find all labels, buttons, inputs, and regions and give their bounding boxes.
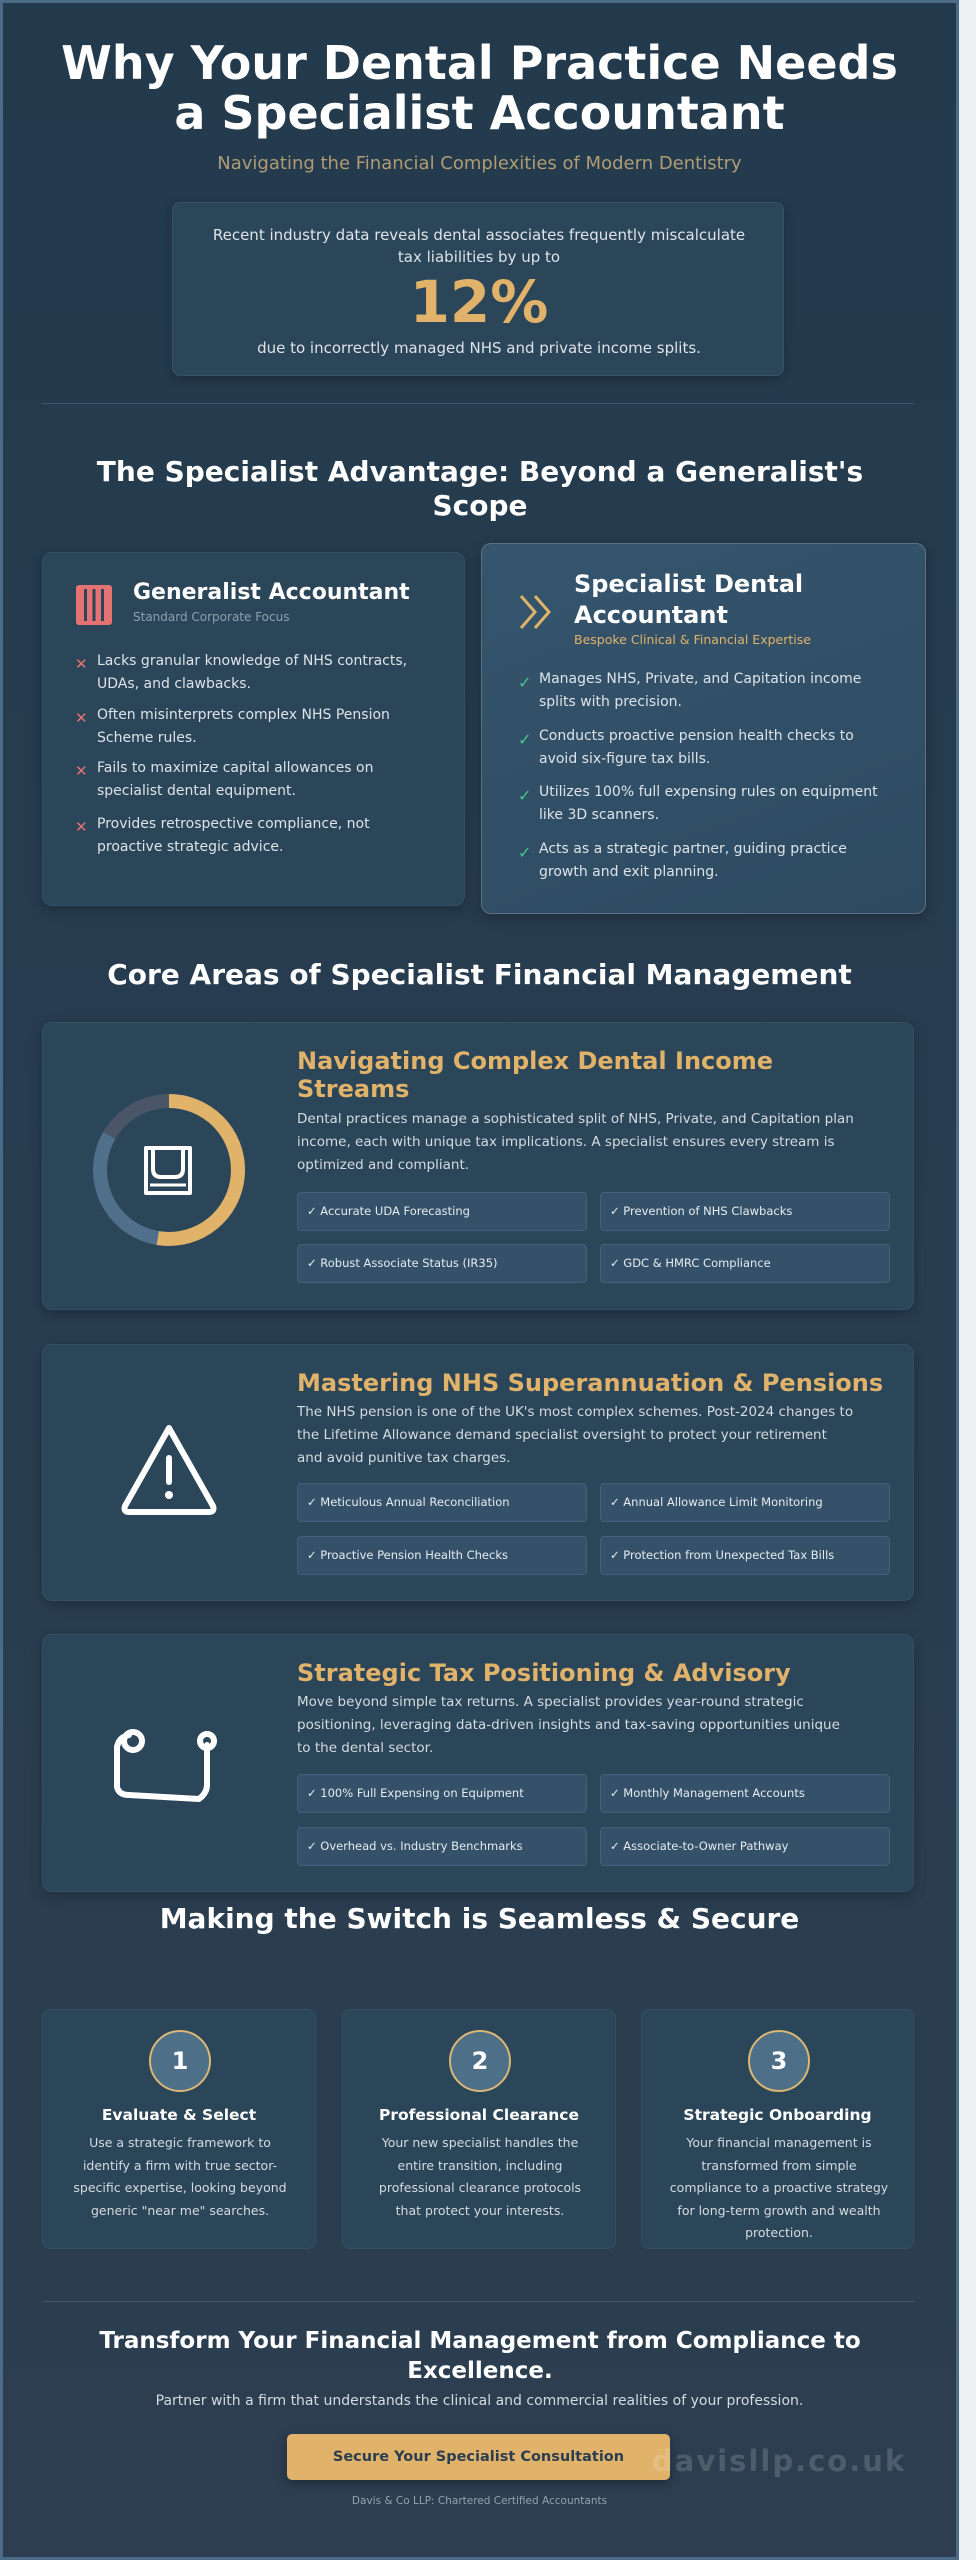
- specialist list: Utilizes 100% full expensing rules on equipment like 3D scanners.: [539, 784, 878, 823]
- income text: Dental practices manage a sophisticated split of NHS, Private, and Capitation plan income, each with unique tax implications. A specialist ensures every stream is optimized and compliant.: [297, 1111, 854, 1173]
- title: [61, 36, 898, 140]
- specialist title: [574, 570, 803, 629]
- title: a Specialist Accountant: [174, 86, 785, 140]
- specialist list: ✓: [518, 730, 531, 749]
- generalist list: ✕: [75, 818, 88, 836]
- advisory feature pills: ✓ Overhead vs. Industry Benchmarks: [307, 1839, 523, 1853]
- specialist list: Conducts proactive pension health checks to avoid six-figure tax bills.: [539, 728, 854, 767]
- CTA button: Secure Your Specialist Consultation: [333, 2449, 624, 2465]
- generalist list: Often misinterprets complex NHS Pension Scheme rules.: [97, 707, 390, 746]
- generalist list: Provides retrospective compliance, not proactive strategic advice.: [97, 816, 370, 855]
- generalist list: Lacks granular knowledge of NHS contracts, UDAs, and clawbacks.: [97, 653, 407, 692]
- icon: generalist building: [76, 585, 112, 625]
- income text: [297, 1047, 854, 1173]
- advisory feature pills: ✓ 100% Full Expensing on Equipment: [307, 1786, 524, 1800]
- stat intro text: Recent industry data reveals dental associates frequently miscalculate: [213, 226, 745, 244]
- generalist list: ✕: [75, 709, 88, 727]
- title: Why Your Dental Practice Needs: [61, 36, 898, 90]
- pensions text: and avoid punitive tax charges.: [297, 1450, 510, 1466]
- generalist list: ✕: [75, 762, 88, 780]
- panel: NHS pensions: [42, 1344, 914, 1601]
- step 1: 1: [172, 2047, 188, 2075]
- step 2: 2: [472, 2047, 488, 2075]
- advisory text: to the dental sector.: [297, 1740, 433, 1756]
- step 2: Professional Clearance: [379, 2106, 579, 2124]
- step 2: [342, 2009, 616, 2249]
- pensions feature pills: ✓ Annual Allowance Limit Monitoring: [610, 1495, 823, 1509]
- pensions feature pills: ✓ Proactive Pension Health Checks: [307, 1548, 508, 1562]
- step 3: 3: [771, 2047, 787, 2075]
- specialist title: Specialist Dental: [574, 570, 803, 598]
- icon: gold chevrons: [520, 595, 551, 629]
- footer credit: Davis & Co LLP: Chartered Certified Accountants: [352, 2495, 607, 2507]
- icon: strategy scribble: [114, 1729, 217, 1802]
- advisory feature pills: ✓ Associate-to-Owner Pathway: [610, 1839, 788, 1853]
- step 3: Your financial management is transformed from simple compliance to a proactive strategy for long-term growth and wealth protection.: [670, 2135, 888, 2240]
- CTA button: [287, 2434, 670, 2480]
- advisory feature pills: [297, 1774, 890, 1866]
- subtitle: Navigating the Financial Complexities of Modern Dentistry: [217, 153, 742, 174]
- pensions text: The NHS pension is one of the UK's most complex schemes. Post-2024 changes to: [297, 1404, 853, 1420]
- specialist list: [518, 671, 878, 880]
- advisory text: Move beyond simple tax returns. A specialist provides year-round strategic: [297, 1694, 804, 1710]
- panel: specialist: [481, 543, 926, 914]
- panel: tax advisory: [42, 1634, 914, 1892]
- specialist title: Accountant: [574, 601, 728, 629]
- step 2: Your new specialist handles the entire transition, including professional clearance protocols that protect your interests.: [379, 2135, 581, 2218]
- pensions text: Mastering NHS Superannuation & Pensions: [297, 1369, 883, 1397]
- specialist list: ✓: [518, 673, 531, 692]
- step 3: Strategic Onboarding: [683, 2106, 872, 2124]
- income feature pills: [297, 1192, 890, 1283]
- stat intro text: [213, 226, 745, 266]
- heading: core areas: Core Areas of Specialist Financial Management: [107, 958, 852, 991]
- step 1: Evaluate & Select: [102, 2106, 256, 2124]
- step 3: [641, 2009, 914, 2249]
- step 1: [42, 2009, 316, 2249]
- pensions text: the Lifetime Allowance demand specialist oversight to protect your retirement: [297, 1427, 827, 1443]
- generalist list: ✕: [75, 655, 88, 673]
- income feature pills: ✓ Accurate UDA Forecasting: [307, 1204, 470, 1218]
- step 1: Use a strategic framework to identify a firm with true sector-specific expertise, looking beyond generic "near me" searches.: [73, 2135, 287, 2218]
- stat intro text: tax liabilities by up to: [398, 248, 560, 266]
- advisory feature pills: ✓ Monthly Management Accounts: [610, 1786, 805, 1800]
- advisory text: [297, 1659, 840, 1756]
- CTA subtext: Partner with a firm that understands the clinical and commercial realities of your profession.: [156, 2393, 803, 2409]
- specialist list: ✓: [518, 843, 531, 862]
- specialist list: Manages NHS, Private, and Capitation income splits with precision.: [539, 671, 861, 710]
- pensions feature pills: ✓ Protection from Unexpected Tax Bills: [610, 1548, 834, 1562]
- specialist subtitle: Bespoke Clinical & Financial Expertise: [574, 632, 811, 647]
- generalist list: Fails to maximize capital allowances on specialist dental equipment.: [97, 760, 374, 799]
- heading: making the switch: Making the Switch is Seamless & Secure: [160, 1902, 799, 1935]
- chart: income donut: [93, 1094, 245, 1246]
- panel: income streams: [42, 1022, 914, 1310]
- pensions text: [296, 1369, 883, 1466]
- stat number: 12%: [410, 268, 548, 336]
- generalist list: [75, 653, 407, 855]
- income feature pills: ✓ GDC & HMRC Compliance: [610, 1256, 771, 1270]
- heading: specialist advantage: The Specialist Advantage: Beyond a Generalist's Scope: [97, 455, 863, 522]
- income text: Navigating Complex Dental Income: [297, 1047, 773, 1075]
- stat callout: [172, 202, 784, 376]
- pensions feature pills: ✓ Meticulous Annual Reconciliation: [307, 1495, 510, 1509]
- specialist list: Acts as a strategic partner, guiding practice growth and exit planning.: [539, 841, 847, 880]
- income feature pills: ✓ Robust Associate Status (IR35): [307, 1256, 498, 1270]
- generalist title: Generalist Accountant: [133, 580, 410, 605]
- icon: warning triangle: [122, 1425, 216, 1515]
- stat caption: due to incorrectly managed NHS and private income splits.: [257, 339, 701, 357]
- specialist list: ✓: [518, 786, 531, 805]
- advisory text: Strategic Tax Positioning & Advisory: [297, 1659, 791, 1687]
- CTA heading: Transform Your Financial Management from Compliance to Excellence.: [99, 2328, 861, 2384]
- generalist subtitle: Standard Corporate Focus: [133, 610, 289, 624]
- watermark: davisllp.co.uk: [652, 2444, 906, 2478]
- pensions feature pills: [297, 1483, 890, 1575]
- advisory text: positioning, leveraging data-driven insights and tax-saving opportunities unique: [297, 1717, 840, 1733]
- income text: Streams: [297, 1075, 409, 1103]
- panel: generalist: [42, 552, 465, 906]
- income feature pills: ✓ Prevention of NHS Clawbacks: [610, 1204, 792, 1218]
